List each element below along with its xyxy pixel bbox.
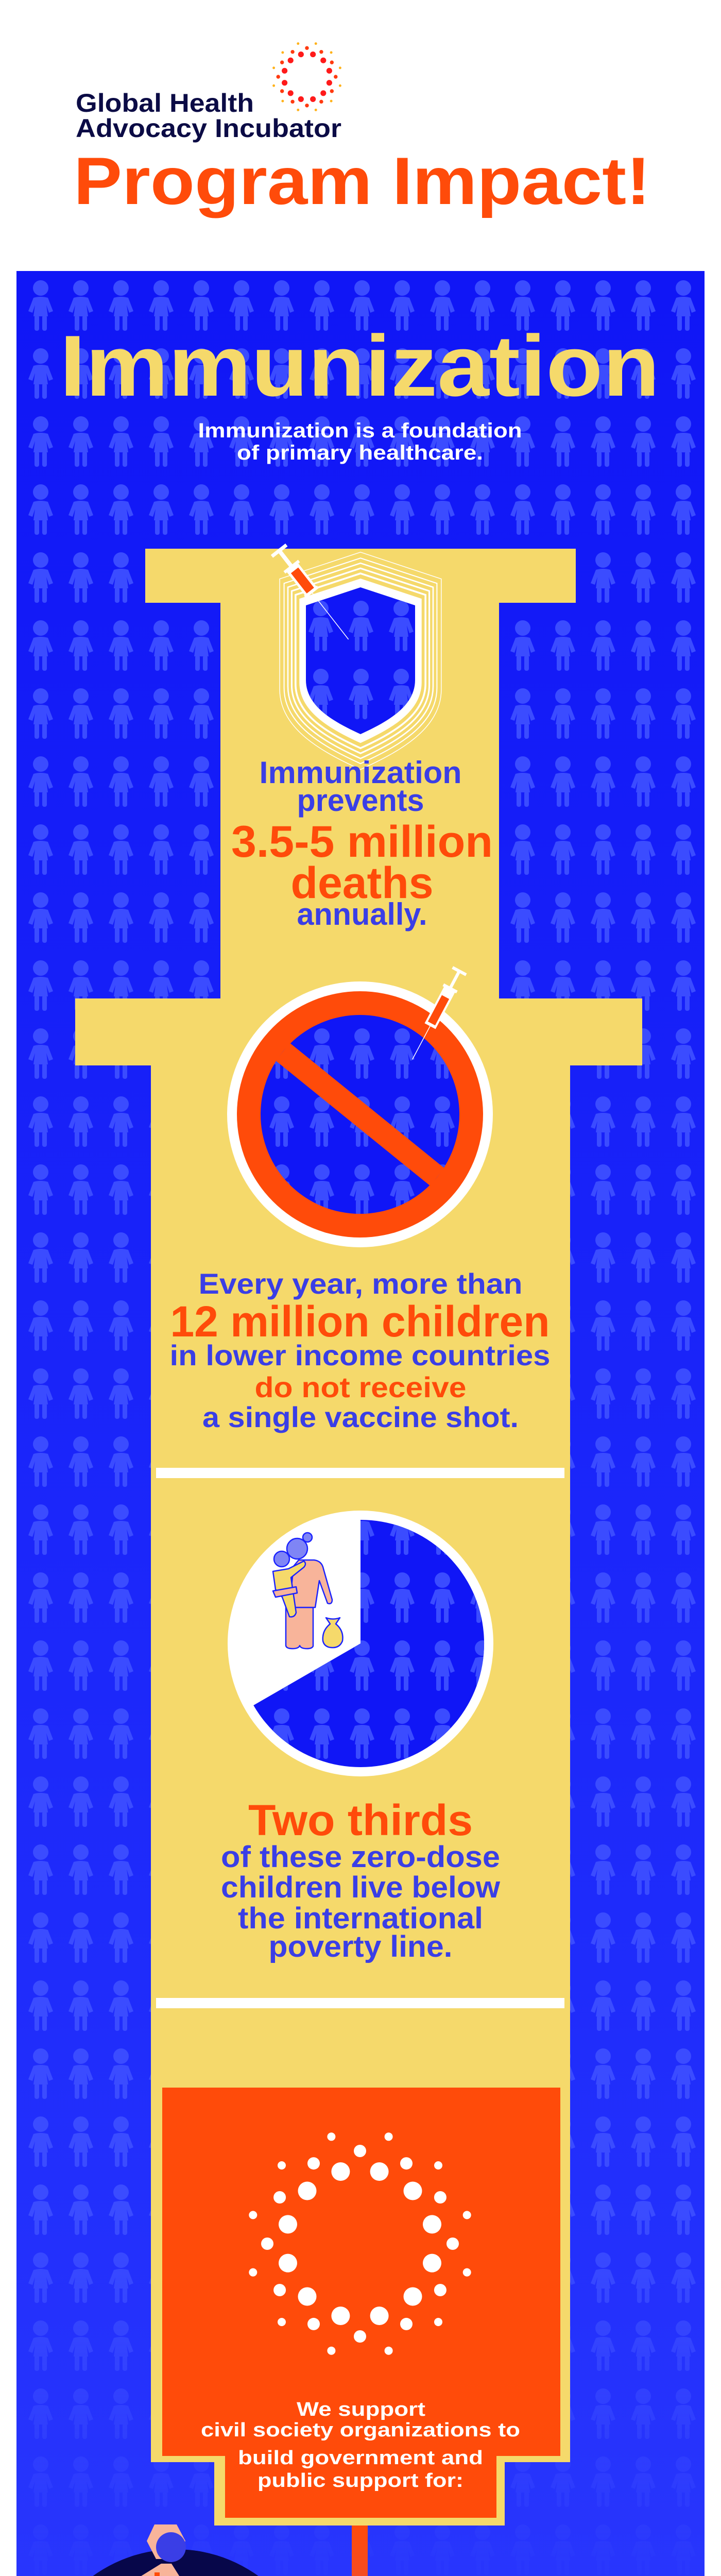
syringe body: [75, 549, 642, 2526]
subtitle: Immunization is a foundation: [198, 419, 522, 442]
text: prevents deaths: deaths: [290, 858, 434, 908]
text: 12 million children: a single vaccine shot.: [202, 1401, 519, 1433]
logo text: Global Health: [76, 89, 254, 117]
text: prevents deaths: Immunization: [260, 755, 461, 790]
icon: white sun: [249, 2132, 471, 2355]
text: two thirds: the international: [238, 1902, 483, 1935]
text: 12 million children: Every year, more than: [199, 1267, 522, 1300]
icon: mother with child and money bag: [273, 1533, 342, 1649]
text: 12 million children: [170, 1267, 550, 1433]
text: two thirds: children live below: [221, 1871, 501, 1904]
text: we support: civil society organizations to: [201, 2419, 520, 2441]
text: we support: [201, 2399, 520, 2492]
text: 12 million children: in lower income countries: [170, 1339, 550, 1371]
title: Program Impact!: Program Impact!: [74, 143, 650, 218]
text: two thirds: [221, 1796, 501, 1963]
text: we support: public support for:: [258, 2470, 464, 2492]
text: prevents deaths: prevents: [297, 783, 424, 818]
text: prevents deaths: annually.: [297, 897, 427, 931]
text: two thirds: of these zero-dose: [221, 1840, 500, 1874]
arrow: orange stem: [352, 2526, 368, 2576]
text: 12 million children: do not receive: [254, 1371, 467, 1403]
text: two thirds: poverty line.: [269, 1930, 452, 1963]
chart: two-thirds pie: [228, 1511, 493, 1776]
logo text: Advocacy Incubator: [76, 114, 341, 143]
logo text: [76, 89, 341, 143]
circle: domestic resources: [18, 2524, 336, 2576]
icon: no-vaccine sign: [227, 966, 493, 1247]
text: two thirds: Two thirds: [248, 1796, 473, 1844]
text: prevents deaths: 3.5-5 million: [231, 817, 493, 867]
subtitle: of primary healthcare.: [237, 442, 483, 464]
text: prevents deaths: [231, 755, 493, 931]
logo: sun dots: [272, 42, 341, 111]
heading: Immunization: Immunization: [60, 317, 660, 414]
text: 12 million children: 12 million children: [170, 1297, 550, 1346]
icon: shield with syringe: [271, 544, 441, 770]
text: we support: We support: [297, 2399, 425, 2420]
icon: nurse: [87, 2524, 207, 2576]
panel: orange support box: [162, 2088, 560, 2518]
text: we support: build government and: [238, 2447, 483, 2469]
subtitle: [198, 419, 522, 464]
